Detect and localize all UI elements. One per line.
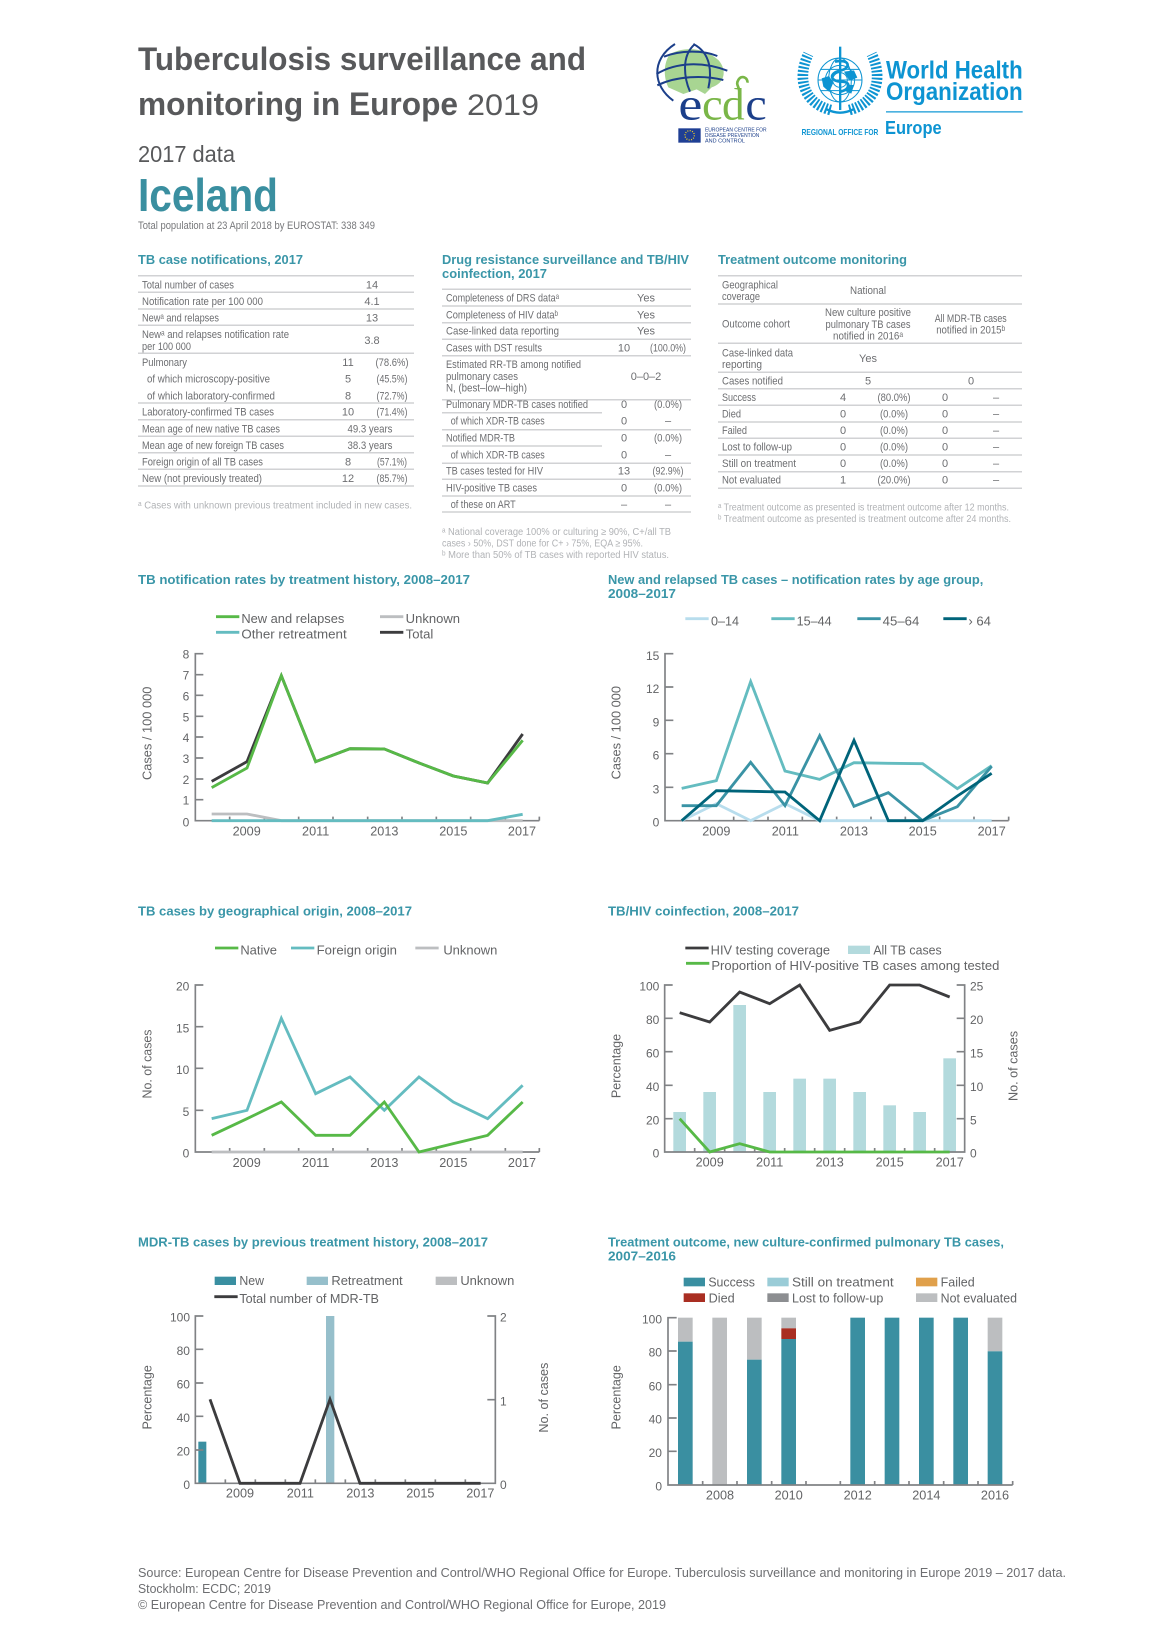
table: treatment outcome rows: New culture positive <box>825 307 911 319</box>
legend: Total <box>406 627 433 641</box>
table: drug resistance rows: – <box>621 499 628 511</box>
legend <box>214 1274 514 1306</box>
axes: 2014 <box>912 1488 940 1502</box>
table: notification rows: (57.1%) <box>377 457 407 469</box>
axes: 0 <box>970 1147 977 1161</box>
table: treatment outcome rows: National <box>850 285 886 297</box>
table: notification rows: 12 <box>342 473 354 485</box>
table: treatment outcome rows: 4 <box>840 392 846 404</box>
logo: ECDC: DISEASE PREVENTION <box>705 133 759 139</box>
table: notification rows: Foreign origin of all TB cases <box>142 457 263 469</box>
axes: 2008 <box>706 1488 734 1502</box>
table: treatment outcome rows: (0.0%) <box>880 442 908 454</box>
axes: 25 <box>970 980 984 994</box>
axes: 2015 <box>439 825 467 839</box>
axes: 1 <box>183 794 190 808</box>
table: drug resistance rows: 0 <box>621 399 627 411</box>
table: treatment outcome rows: Case-linked data <box>722 347 794 359</box>
table: notification rows: Notification rate per 100 000 <box>142 296 263 308</box>
axes: 20 <box>970 1013 984 1027</box>
table: treatment outcome rows: 0 <box>840 425 846 437</box>
table: treatment outcome rows: 0 <box>840 408 846 420</box>
axes: 2011 <box>302 825 329 839</box>
legend <box>685 943 999 973</box>
heading: MDR-TB cases by previous treatment history, 2008–2017 <box>138 1235 488 1250</box>
footnotes: drug resistance: ᵇ More than 50% of TB cases with reported HIV status. <box>442 550 669 561</box>
heading: TB/HIV coinfection, 2008–2017 <box>608 904 799 919</box>
table: notification rows: Mean age of new native TB cases <box>142 423 280 435</box>
legend: HIV testing coverage <box>711 943 830 957</box>
table: notification rows: Total number of cases <box>142 279 234 291</box>
table: drug resistance rows: (0.0%) <box>654 483 682 495</box>
axes: 2012 <box>844 1488 872 1502</box>
axes: 60 <box>177 1378 190 1392</box>
logo: ECDC: EUROPEAN CENTRE FOR <box>705 128 767 134</box>
table: drug resistance rows: of which XDR-TB cases <box>451 449 545 461</box>
table: drug resistance rows: 0 <box>621 433 627 445</box>
legend: Not evaluated <box>941 1291 1017 1305</box>
table: notification rows: of which laboratory-confirmed <box>147 390 275 402</box>
axes: 40 <box>649 1413 662 1427</box>
legend: 0–14 <box>711 614 739 628</box>
table: treatment outcome rows: All MDR-TB cases <box>935 313 1007 325</box>
logo: WHO Regional Office for Europe <box>802 47 1023 138</box>
table: notification rows: 8 <box>345 390 351 402</box>
axes: 5 <box>183 1105 190 1119</box>
axes: Percentage <box>140 1365 154 1429</box>
axes: 8 <box>183 648 190 662</box>
axes: 100 <box>639 980 660 994</box>
footnotes: treatment outcome <box>718 503 1011 525</box>
table: drug resistance rows: of which XDR-TB cases <box>451 416 545 428</box>
axes: 2011 <box>756 1155 783 1169</box>
footnote: TB case notifications: ᵃ Cases with unknown previous treatment included in new cases. <box>138 501 412 512</box>
table: treatment outcome rows: 0 <box>942 408 948 420</box>
source and copyright: © European Centre for Disease Prevention and Control/WHO Regional Office for Europe, 2019 <box>138 1598 666 1612</box>
logo: WHO Regional Office for Europe: World Health <box>886 57 1023 84</box>
table: drug resistance rows: (0.0%) <box>654 399 682 411</box>
axes: 2 <box>500 1311 507 1325</box>
logo: ECDC: c <box>702 79 723 129</box>
axes: 2017 <box>466 1486 494 1500</box>
heading: drug resistance <box>442 252 689 281</box>
table: treatment outcome rows: – <box>993 442 1000 454</box>
table: notification rows: 8 <box>345 457 351 469</box>
axes: 20 <box>176 980 190 994</box>
axes: 100 <box>170 1311 190 1325</box>
axes: 2015 <box>876 1155 904 1169</box>
table: treatment outcome rows: Yes <box>859 353 877 365</box>
axes: 2013 <box>816 1155 844 1169</box>
table: notification rows: 49.3 years <box>348 423 393 435</box>
table: drug resistance rows <box>446 293 686 511</box>
heading: 2007–2016 <box>608 1249 676 1264</box>
legend <box>216 612 460 641</box>
heading: drug resistance: Drug resistance surveillance and TB/HIV <box>442 252 689 267</box>
legend: Native <box>240 943 277 957</box>
logo: WHO Regional Office for Europe: Organization <box>886 79 1023 106</box>
table: drug resistance rows: 0–0–2 <box>631 371 661 383</box>
table: notification rows: 13 <box>366 313 378 325</box>
logo: ECDC <box>657 44 767 144</box>
legend: New and relapses <box>241 612 344 626</box>
table: drug resistance rows: Case-linked data reporting <box>446 326 559 338</box>
country name: Iceland <box>138 169 278 221</box>
legend: Unknown <box>406 612 460 626</box>
axes: 2009 <box>233 1156 261 1170</box>
legend: All TB cases <box>873 943 942 957</box>
table: drug resistance rows: – <box>665 449 672 461</box>
table: treatment outcome rows: Died <box>722 408 741 420</box>
table: treatment outcome rows: Not evaluated <box>722 475 781 487</box>
axes: 15 <box>970 1046 984 1060</box>
axes: 2009 <box>702 825 730 839</box>
table: drug resistance rows: 10 <box>618 342 630 354</box>
table: drug resistance rows: Yes <box>637 293 655 305</box>
axes <box>140 648 539 839</box>
heading: TB cases by geographical origin, 2008–2017 <box>138 904 412 919</box>
series lines <box>682 682 992 821</box>
table: drug resistance rows: Yes <box>637 309 655 321</box>
axes: Percentage <box>610 1365 624 1429</box>
axes: 0 <box>500 1478 507 1492</box>
axes: 2010 <box>775 1488 803 1502</box>
chart: TB cases by geographical origin <box>138 904 539 1170</box>
table: treatment outcome rows: Outcome cohort <box>722 319 790 331</box>
axes: 2015 <box>406 1486 434 1500</box>
axes: No. of cases <box>140 1029 154 1098</box>
table: treatment outcome rows: pulmonary TB cases <box>826 319 911 331</box>
axes: 5 <box>970 1113 977 1127</box>
table: notification rows: Newᵃ and relapses notification rate <box>142 329 289 341</box>
table: drug resistance rows: of these on ART <box>451 499 516 511</box>
table: treatment outcome rows: Failed <box>722 425 747 437</box>
axes: Cases / 100 000 <box>140 687 154 780</box>
bars: all TB cases <box>673 1005 956 1152</box>
axes: 15 <box>176 1021 190 1035</box>
title <box>138 41 586 122</box>
axes: 2009 <box>226 1486 254 1500</box>
logo: ECDC: AND CONTROL <box>705 138 745 144</box>
table: treatment outcome rows: Geographical <box>722 279 778 291</box>
table: treatment outcome rows: reporting <box>722 359 762 371</box>
table: notification rows: 10 <box>342 407 354 419</box>
table: drug resistance rows: – <box>665 416 672 428</box>
axes <box>140 1311 551 1500</box>
table: notification rows: (45.5%) <box>376 374 408 386</box>
footnotes: drug resistance: ᵃ National coverage 100% or culturing ≥ 90%, C+/all TB <box>442 527 671 538</box>
axes: 40 <box>646 1080 660 1094</box>
chart: notification rates by age group <box>608 572 1009 839</box>
axes: 2017 <box>508 1156 536 1170</box>
table: drug resistance rows: TB cases tested for HIV <box>446 466 544 478</box>
chart: MDR-TB cases by previous treatment history <box>138 1235 551 1500</box>
table: notification rows: Laboratory-confirmed TB cases <box>142 407 274 419</box>
panel: drug resistance surveillance and TB/HIV coinfection <box>442 252 691 561</box>
table: notification rows: Newᵃ and relapses <box>142 313 219 325</box>
legend: Other retreatment <box>241 627 347 641</box>
table: treatment outcome rows: (80.0%) <box>878 392 910 404</box>
legend: 15–44 <box>797 614 832 628</box>
axes: 80 <box>177 1344 190 1358</box>
table: treatment outcome rows: 0 <box>942 475 948 487</box>
source and copyright: Stockholm: ECDC; 2019 <box>138 1582 271 1596</box>
chart: TB notification rates by treatment history <box>138 572 539 839</box>
table: drug resistance rows: Cases with DST results <box>446 342 542 354</box>
table: drug resistance rows: Pulmonary MDR-TB cases notified <box>446 399 588 411</box>
table: drug resistance rows: 0 <box>621 483 627 495</box>
axes: 0 <box>653 815 660 829</box>
axes: 80 <box>649 1346 662 1360</box>
axes: 60 <box>646 1046 660 1060</box>
logo: ECDC: c <box>745 79 767 129</box>
table: treatment outcome rows: 1 <box>840 475 846 487</box>
legend: New <box>239 1274 265 1288</box>
axes: 2013 <box>370 825 398 839</box>
table: drug resistance rows: Estimated RR-TB among notified <box>446 359 581 371</box>
axes: 2009 <box>233 825 261 839</box>
axes: 2013 <box>370 1156 398 1170</box>
axes <box>610 980 1020 1169</box>
axes: 7 <box>183 669 190 683</box>
table: treatment outcome rows: 0 <box>968 375 974 387</box>
heading: drug resistance: coinfection, 2017 <box>442 266 547 281</box>
stacked bars <box>678 1318 1002 1485</box>
heading <box>608 1235 1004 1264</box>
heading: New and relapsed TB cases – notification rates by age group, <box>608 572 983 587</box>
table: drug resistance rows: pulmonary cases <box>446 371 518 383</box>
table: drug resistance rows: (0.0%) <box>654 433 682 445</box>
axes: 100 <box>642 1312 662 1326</box>
axes: 0 <box>655 1480 662 1494</box>
axes: 0 <box>653 1147 660 1161</box>
axes: 0 <box>183 1478 190 1492</box>
table: drug resistance rows: N, (best–low–high) <box>446 383 527 395</box>
axes: 20 <box>649 1446 662 1460</box>
chart: TB/HIV coinfection <box>608 904 1020 1169</box>
table: treatment outcome rows: (0.0%) <box>880 458 908 470</box>
axes: 2011 <box>287 1486 314 1500</box>
axes: 10 <box>176 1063 190 1077</box>
axes: 3 <box>183 752 190 766</box>
panel: TB case notifications <box>138 252 414 512</box>
bars <box>198 1316 334 1483</box>
table: treatment outcome rows: 0 <box>840 458 846 470</box>
table: drug resistance rows: (100.0%) <box>650 342 686 354</box>
axes: 6 <box>653 749 660 763</box>
table: notification rows: (71.4%) <box>376 407 408 419</box>
axes: 20 <box>646 1113 660 1127</box>
legend: Unknown <box>443 943 497 957</box>
footnotes: drug resistance <box>442 527 671 561</box>
heading: treatment outcome monitoring: Treatment outcome monitoring <box>718 252 907 267</box>
legend: Unknown <box>460 1274 514 1288</box>
axes: 2016 <box>981 1488 1009 1502</box>
table: treatment outcome rows: 0 <box>840 442 846 454</box>
axes: 2017 <box>978 825 1006 839</box>
table: treatment outcome rows: – <box>993 425 1000 437</box>
table: drug resistance rows: Notified MDR-TB <box>446 433 515 445</box>
axes: No. of cases <box>1006 1031 1020 1101</box>
legend: Retreatment <box>331 1274 403 1288</box>
table: drug resistance rows: 0 <box>621 416 627 428</box>
legend: Died <box>709 1291 735 1305</box>
axes: 12 <box>646 682 660 696</box>
table: treatment outcome rows: (0.0%) <box>880 408 908 420</box>
heading: TB notification rates by treatment history, 2008–2017 <box>138 572 470 587</box>
legend <box>215 943 497 957</box>
footnotes: treatment outcome: ᵃ Treatment outcome as presented is treatment outcome after 12 months. <box>718 503 1009 514</box>
legend: 45–64 <box>883 614 919 628</box>
axes: 2011 <box>772 825 799 839</box>
table: notification rows: Pulmonary <box>142 357 187 369</box>
legend: Failed <box>941 1276 975 1290</box>
table: treatment outcome rows: (20.0%) <box>878 475 910 487</box>
axes: 6 <box>183 689 190 703</box>
table: notification rows: 11 <box>342 357 354 369</box>
table: drug resistance rows: 0 <box>621 449 627 461</box>
axes: 2013 <box>840 825 868 839</box>
axes: No. of cases <box>537 1363 551 1433</box>
title: monitoring in Europe <box>138 86 458 122</box>
series lines <box>680 985 950 1152</box>
table: treatment outcome rows: 0 <box>942 442 948 454</box>
axes: 10 <box>970 1080 984 1094</box>
logo: WHO Regional Office for Europe: REGIONAL OFFICE FOR <box>802 127 878 137</box>
title: 2019 <box>467 89 539 122</box>
legend: Still on treatment <box>792 1276 894 1290</box>
source and copyright <box>138 1566 1066 1612</box>
axes: 80 <box>646 1013 660 1027</box>
footnotes: drug resistance: cases › 50%, DST done for C+ › 75%, EQA ≥ 95%. <box>442 539 643 550</box>
axes: 5 <box>183 710 190 724</box>
legend: Success <box>708 1276 755 1290</box>
table: drug resistance rows: (92.9%) <box>652 466 684 478</box>
table: notification rows: (78.6%) <box>376 357 408 369</box>
panel: treatment outcome monitoring <box>718 252 1022 525</box>
logo: ECDC: d <box>722 79 745 129</box>
table: notification rows: of which microscopy-positive <box>147 374 270 386</box>
axes: 2015 <box>439 1156 467 1170</box>
table: notification rows: 38.3 years <box>348 440 393 452</box>
heading: Treatment outcome, new culture-confirmed pulmonary TB cases, <box>608 1235 1004 1250</box>
axes: 2009 <box>696 1155 724 1169</box>
axes: 3 <box>653 782 660 796</box>
axes: 2017 <box>936 1155 964 1169</box>
axes: 0 <box>183 1147 190 1161</box>
table: treatment outcome rows: coverage <box>722 291 760 303</box>
axes: 1 <box>500 1394 507 1408</box>
axes: Cases / 100 000 <box>610 686 624 779</box>
table: treatment outcome rows: (0.0%) <box>880 425 908 437</box>
table: treatment outcome rows: 5 <box>865 375 871 387</box>
axes: Percentage <box>610 1034 624 1098</box>
legend: Total number of MDR-TB <box>239 1292 379 1306</box>
axes: 2017 <box>508 825 536 839</box>
table: drug resistance rows: HIV-positive TB cases <box>446 483 537 495</box>
table: treatment outcome rows: notified in 2016ᵃ <box>833 330 904 342</box>
table: drug resistance rows: Completeness of DRS dataᵃ <box>446 293 560 305</box>
table: treatment outcome rows: 0 <box>942 392 948 404</box>
logo: WHO Regional Office for Europe: Europe <box>885 117 942 138</box>
table: treatment outcome rows <box>722 279 1007 487</box>
table: notification rows: 14 <box>366 279 378 291</box>
axes: 0 <box>183 815 190 829</box>
table: notification rows: (72.7%) <box>376 390 408 402</box>
table: treatment outcome rows: Still on treatment <box>722 458 796 470</box>
table: notification rows: Mean age of new foreign TB cases <box>142 440 284 452</box>
table: treatment outcome rows: 0 <box>942 458 948 470</box>
table: treatment outcome rows: – <box>993 392 1000 404</box>
table: treatment outcome rows: – <box>993 408 1000 420</box>
table: treatment outcome rows: Success <box>722 392 756 404</box>
table: notification rows: (85.7%) <box>376 473 408 485</box>
legend: Foreign origin <box>317 943 397 957</box>
axes: 2011 <box>302 1156 329 1170</box>
population note: Total population at 23 April 2018 by EUROSTAT: 338 349 <box>138 220 375 232</box>
title: Tuberculosis surveillance and <box>138 41 586 77</box>
series lines <box>212 1018 523 1152</box>
axes: 4 <box>183 731 190 745</box>
table: notification rows: New (not previously treated) <box>142 473 262 485</box>
source and copyright: Source: European Centre for Disease Prevention and Control/WHO Regional Office for Europe. Tuberculosis surveillance and monitoring in Europe 2019 – 2017 data. <box>138 1566 1066 1580</box>
axes <box>610 649 1009 839</box>
axes: 20 <box>177 1445 190 1459</box>
heading: TB case notifications: TB case notifications, 2017 <box>138 252 303 267</box>
legend <box>684 1276 1017 1305</box>
table: treatment outcome rows: Lost to follow-up <box>722 442 792 454</box>
chart: treatment outcome, new culture-confirmed pulmonary TB cases <box>608 1235 1017 1502</box>
table: drug resistance rows: Yes <box>637 326 655 338</box>
table: drug resistance rows: – <box>665 499 672 511</box>
heading <box>608 572 983 601</box>
table: drug resistance rows: Completeness of HIV dataᵇ <box>446 309 558 321</box>
table: treatment outcome rows: – <box>993 458 1000 470</box>
table: drug resistance rows: 13 <box>618 466 630 478</box>
table: notification rows: per 100 000 <box>142 341 191 353</box>
logo: ECDC: e <box>678 79 702 129</box>
legend <box>685 614 991 628</box>
table: notification rows: 4.1 <box>364 296 380 308</box>
heading: 2008–2017 <box>608 586 676 601</box>
table: notification rows: 5 <box>345 374 351 386</box>
axes: 15 <box>646 649 660 663</box>
axes: 60 <box>649 1379 662 1393</box>
legend: Proportion of HIV-positive TB cases among tested <box>711 959 999 973</box>
table: treatment outcome rows: – <box>993 475 1000 487</box>
axes <box>140 980 539 1170</box>
table: treatment outcome rows: Cases notified <box>722 375 783 387</box>
legend: Lost to follow-up <box>792 1291 883 1305</box>
legend: › 64 <box>968 614 991 628</box>
axes: 2 <box>183 773 190 787</box>
subtitle: data year: 2017 data <box>138 141 235 167</box>
axes: 40 <box>177 1411 190 1425</box>
series line <box>210 1399 481 1483</box>
axes <box>610 1312 1013 1502</box>
table: notification rows: 3.8 <box>364 335 380 347</box>
axes: 9 <box>653 715 660 729</box>
axes: 2015 <box>909 825 937 839</box>
footnotes: treatment outcome: ᵇ Treatment outcome as presented is treatment outcome after 24 months. <box>718 514 1011 525</box>
table: notification rows <box>142 279 408 485</box>
table: treatment outcome rows: notified in 2015ᵇ <box>936 324 1005 336</box>
series lines <box>212 676 523 821</box>
axes: 2013 <box>346 1486 374 1500</box>
table: treatment outcome rows: 0 <box>942 425 948 437</box>
